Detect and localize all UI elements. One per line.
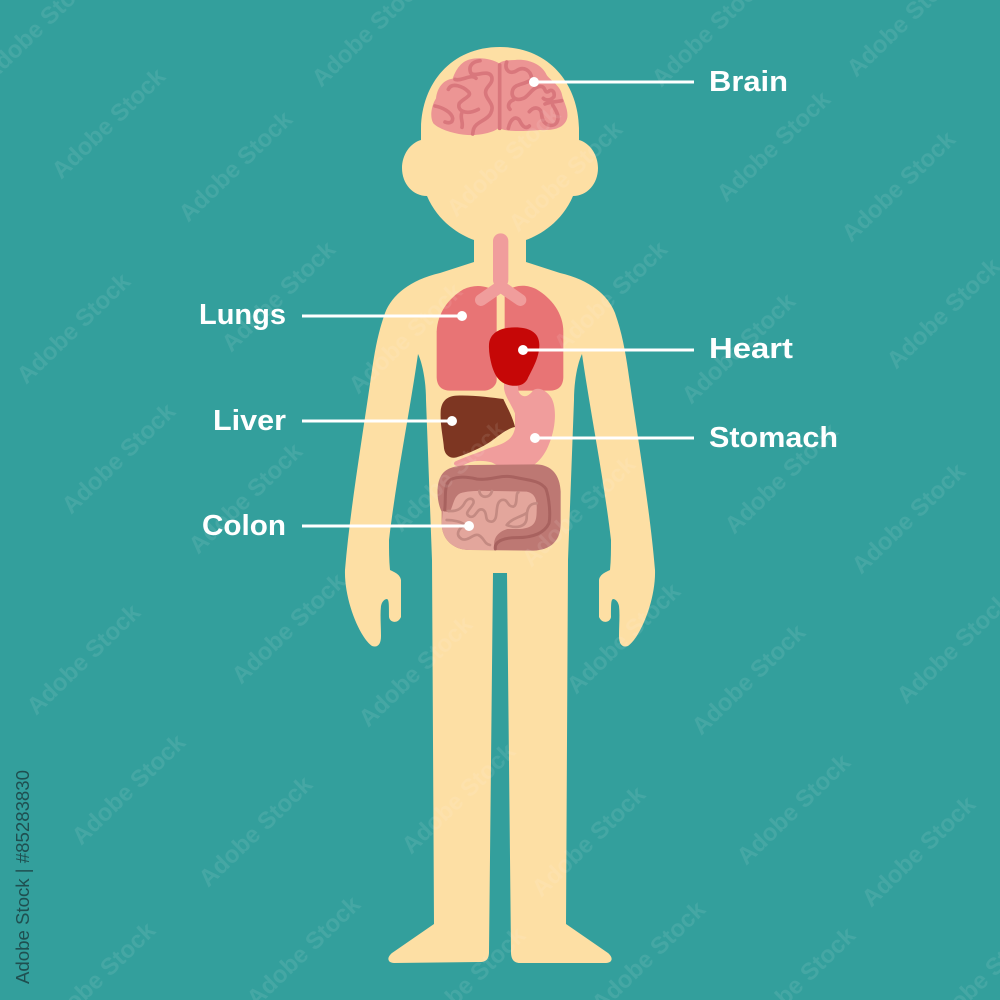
watermark pattern: Adobe Stock [527,780,651,902]
callout: brain [529,66,788,98]
callout: heart [518,333,793,365]
watermark pattern: Adobe Stock [227,567,351,689]
watermark pattern: Adobe Stock [387,415,511,537]
watermark pattern: Adobe Stock [677,287,801,409]
watermark pattern: Adobe Stock [720,417,844,539]
callout: brain: Brain [709,66,788,98]
watermark pattern: Adobe Stock [217,235,341,357]
watermark pattern: Adobe Stock [47,62,171,184]
watermark pattern: Adobe Stock [712,85,836,207]
watermark pattern: Adobe Stock [174,105,298,227]
colon centre line [445,476,550,549]
callout: liver: Liver [213,405,286,437]
icon: trachea [481,241,520,300]
small intestine coils [447,491,537,545]
watermark pattern: Adobe Stock [837,125,961,247]
callout: stomach [530,422,838,454]
callout: colon: Colon [202,510,286,542]
callout: liver [213,405,457,437]
callout: heart: Heart [709,333,793,365]
stock id caption: Adobe Stock | #85283830 [13,770,33,984]
icon: heart [489,327,539,386]
watermark pattern: Adobe Stock [562,577,686,699]
watermark pattern: Adobe Stock [184,437,308,559]
watermark pattern: Adobe Stock [57,397,181,519]
icon: lungs [437,241,563,391]
small intestine area [442,491,537,550]
watermark pattern: Adobe Stock [517,450,641,572]
watermark pattern: Adobe Stock [857,790,981,912]
watermark pattern: Adobe Stock [12,267,136,389]
callout: lungs [199,299,467,331]
watermark pattern: Adobe Stock [549,235,673,357]
icon: liver [441,396,515,458]
watermark pattern: Adobe Stock [67,728,191,850]
watermark pattern: Adobe Stock [687,618,811,740]
watermark pattern: Adobe Stock [732,748,856,870]
watermark pattern: Adobe Stock [344,277,468,399]
watermark pattern: Adobe Stock [194,770,318,892]
callout: stomach: Stomach [709,422,838,454]
icon: colon and intestines [438,464,561,551]
icon: brain [431,58,567,135]
watermark pattern: Adobe Stock [397,737,521,859]
watermark pattern: Adobe Stock [22,598,146,720]
watermark pattern: Adobe Stock [442,100,566,222]
icon: stomach [454,378,555,472]
watermark pattern: Adobe Stock [354,610,478,732]
body silhouette [345,47,655,963]
callout: lungs: Lungs [199,299,286,331]
callout: colon [202,510,474,542]
watermark pattern: Adobe Stock [847,457,971,579]
watermark pattern: Adobe Stock [504,115,628,237]
